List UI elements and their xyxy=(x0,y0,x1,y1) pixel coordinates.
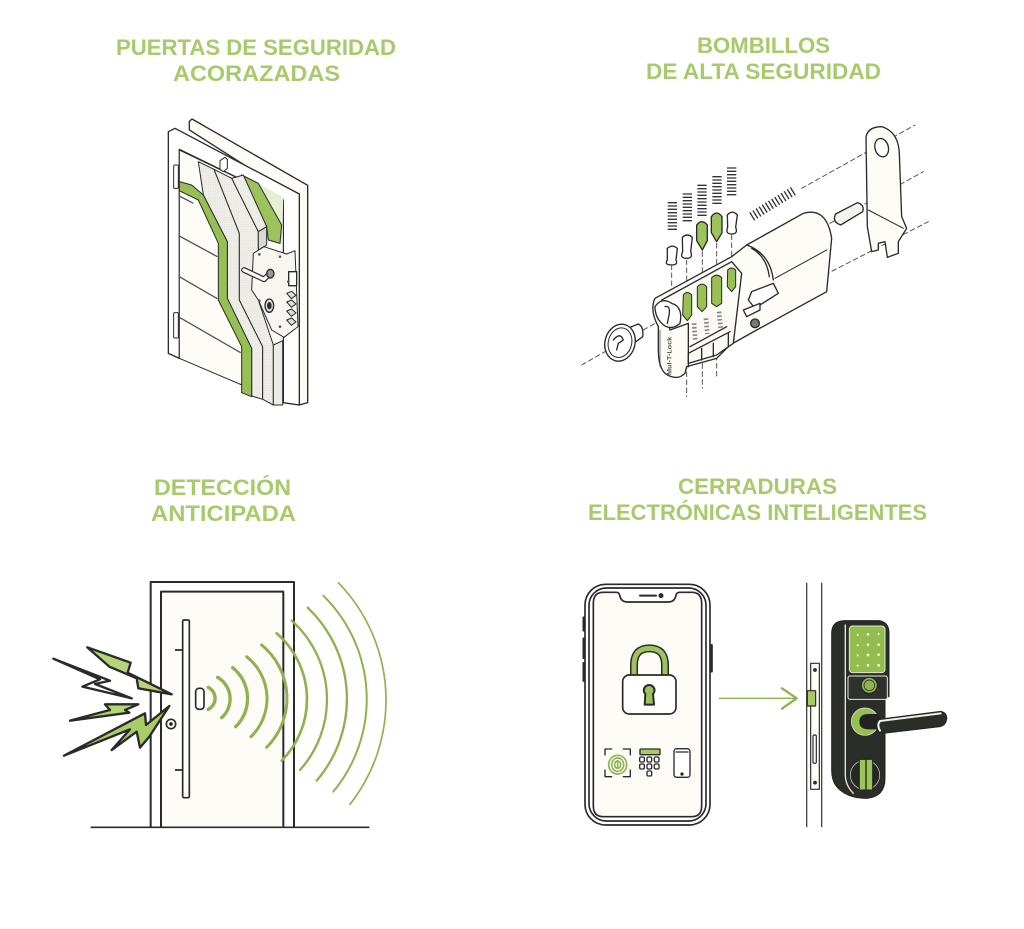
icon: fingerprint xyxy=(605,749,630,777)
heading: cerraduras: CERRADURAS xyxy=(678,474,837,499)
sensor xyxy=(196,688,204,709)
illustration: phone and smart lock xyxy=(583,583,947,827)
heading: bombillos: DE ALTA SEGURIDAD xyxy=(646,59,881,84)
smart lock xyxy=(832,621,947,798)
sensor waves xyxy=(208,583,386,804)
pin chamber xyxy=(662,262,742,363)
door edge xyxy=(807,583,822,827)
heading: detección: DETECCIÓN xyxy=(154,475,291,500)
heading: detección: ANTICIPADA xyxy=(151,501,296,526)
arrow xyxy=(719,688,797,709)
hinges xyxy=(174,157,227,338)
door panel grooves xyxy=(179,196,241,353)
cylinder body xyxy=(653,212,832,377)
cam xyxy=(748,283,778,308)
smartphone xyxy=(583,584,712,825)
long handle xyxy=(175,620,189,798)
green pins inside xyxy=(683,268,736,321)
heading: cerraduras xyxy=(588,474,927,525)
small dowel xyxy=(834,203,863,225)
panel: puertas de seguridad acorazadas xyxy=(116,35,396,405)
door frame xyxy=(91,582,369,827)
icon: phone xyxy=(674,749,690,777)
illustration: exploded lock cylinder xyxy=(582,125,928,397)
icon: keypad xyxy=(640,749,660,776)
panel: detección anticipada xyxy=(53,475,386,827)
impact bolts xyxy=(53,647,172,756)
heading: bombillos xyxy=(646,33,881,84)
illustration: armored door cutaway xyxy=(168,119,308,405)
padlock xyxy=(623,648,676,714)
heading: detección xyxy=(151,475,296,526)
illustration: exploded lock cylinder: Mul-T-Lock xyxy=(667,336,673,375)
illustration: door with sensor waves xyxy=(53,582,386,827)
key cover xyxy=(601,321,643,365)
heading: puertas xyxy=(116,35,396,86)
dashed guide lines xyxy=(582,125,928,397)
panel: cerraduras electrónicas inteligentes xyxy=(583,474,947,827)
door lock xyxy=(166,719,176,729)
strike plate xyxy=(807,663,819,789)
lock plate with handle xyxy=(244,247,298,337)
keyway xyxy=(655,301,681,327)
cam plate xyxy=(866,127,907,257)
heading: bombillos: BOMBILLOS xyxy=(697,33,830,58)
heading: puertas: PUERTAS DE SEGURIDAD xyxy=(116,35,396,60)
upper pins xyxy=(666,212,737,265)
panel: bombillos de alta seguridad xyxy=(582,33,928,397)
springs xyxy=(672,167,732,231)
heading: cerraduras: ELECTRÓNICAS INTELIGENTES xyxy=(588,500,927,525)
heading: puertas: ACORAZADAS xyxy=(173,61,340,86)
